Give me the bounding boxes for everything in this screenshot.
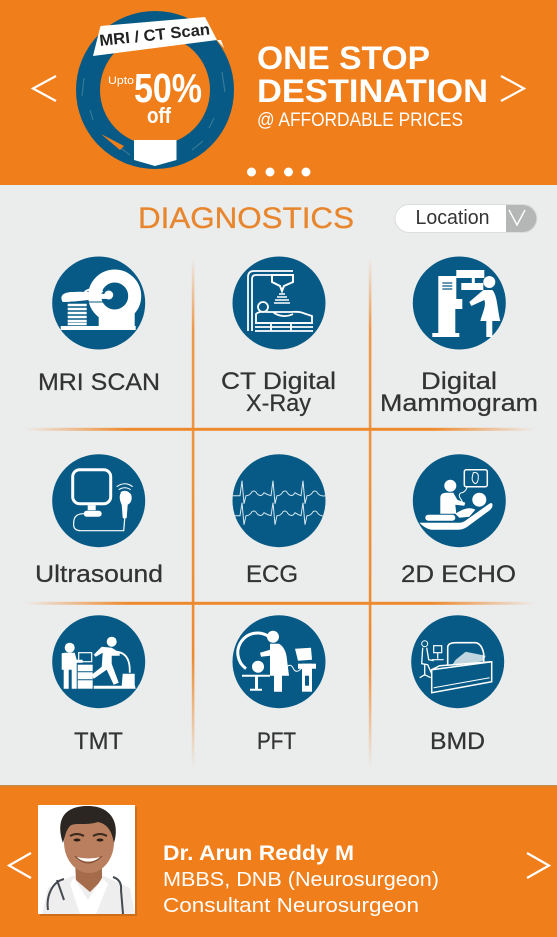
service: CT Digital X-Ray <box>221 256 336 417</box>
label: MRI SCAN: MRI SCAN <box>38 369 160 396</box>
service: BMD <box>411 615 504 755</box>
service: 2D Echo <box>401 454 516 588</box>
icon: MRI scanner <box>52 256 145 350</box>
ribbon: MRI / CT Scan <box>93 17 224 56</box>
label: CT Digital X-Ray: CT Digital <box>221 368 336 395</box>
label: Digital Mammogram: Digital <box>421 368 497 395</box>
label: PFT: PFT <box>257 728 296 755</box>
icon: treadmill test <box>52 615 145 708</box>
brush ring <box>82 23 225 166</box>
service: Ultrasound <box>35 454 163 588</box>
heading: one stop destination <box>257 40 488 131</box>
label: Digital Mammogram <box>380 368 538 417</box>
ribbon: MRI / CT Scan: MRI / CT Scan <box>99 21 211 50</box>
label: BMD: BMD <box>430 728 485 755</box>
text: upto 50% off: off <box>147 103 172 128</box>
text: doctor details: MBBS, DNB (Neurosurgeon) <box>163 869 439 891</box>
text: doctor details: Dr. Arun Reddy M <box>163 842 354 865</box>
icon: ECG trace <box>232 454 326 547</box>
service: Digital Mammogram <box>380 256 538 417</box>
panel: top banner <box>0 0 557 185</box>
icon: echo exam <box>413 454 506 547</box>
heading: one stop destination: DESTINATION <box>257 73 488 109</box>
service: PFT <box>232 615 326 755</box>
text: upto 50% off <box>108 65 202 128</box>
text: upto 50% off: 50% <box>134 65 202 111</box>
service: MRI scan <box>38 256 160 396</box>
icon: CT machine <box>232 256 326 350</box>
label: TMT: TMT <box>74 728 123 755</box>
label: Digital Mammogram: Mammogram <box>380 390 538 417</box>
label: CT Digital X-Ray: X-Ray <box>246 390 311 417</box>
location dropdown: Location <box>416 207 490 229</box>
icon: bone density scanner <box>411 615 504 708</box>
label: ECG: ECG <box>246 561 298 588</box>
service: TMT <box>52 615 145 755</box>
heading: one stop destination: ONE STOP <box>257 40 430 76</box>
text: doctor details: Consultant Neurosurgeon <box>163 895 419 917</box>
badge: 50% off offer <box>82 17 225 166</box>
location dropdown <box>395 204 537 232</box>
label: 2D ECHO: 2D ECHO <box>401 561 516 588</box>
arrow: banner right <box>501 76 524 101</box>
white tag <box>134 140 176 166</box>
icon: pulmonary function test <box>232 615 326 708</box>
arrow: doctor right <box>527 853 549 878</box>
label: CT Digital X-Ray <box>221 368 336 417</box>
icon: ultrasound monitor and probe <box>52 454 145 547</box>
arrow: doctor left <box>9 853 31 878</box>
text: upto 50% off: Upto <box>108 75 134 87</box>
carousel dots <box>247 168 310 176</box>
heading: diagnostics: DIAGNOSTICS <box>138 202 354 235</box>
photo: doctor portrait <box>38 805 137 916</box>
heading: one stop destination: @ AFFORDABLE PRICES <box>257 109 463 131</box>
arrow: banner left <box>33 76 56 101</box>
label: Ultrasound: Ultrasound <box>35 561 163 588</box>
service: ECG <box>232 454 326 588</box>
panel: doctor profile <box>0 785 557 937</box>
icon: mammography machine <box>413 256 506 350</box>
text: doctor details <box>163 842 439 917</box>
